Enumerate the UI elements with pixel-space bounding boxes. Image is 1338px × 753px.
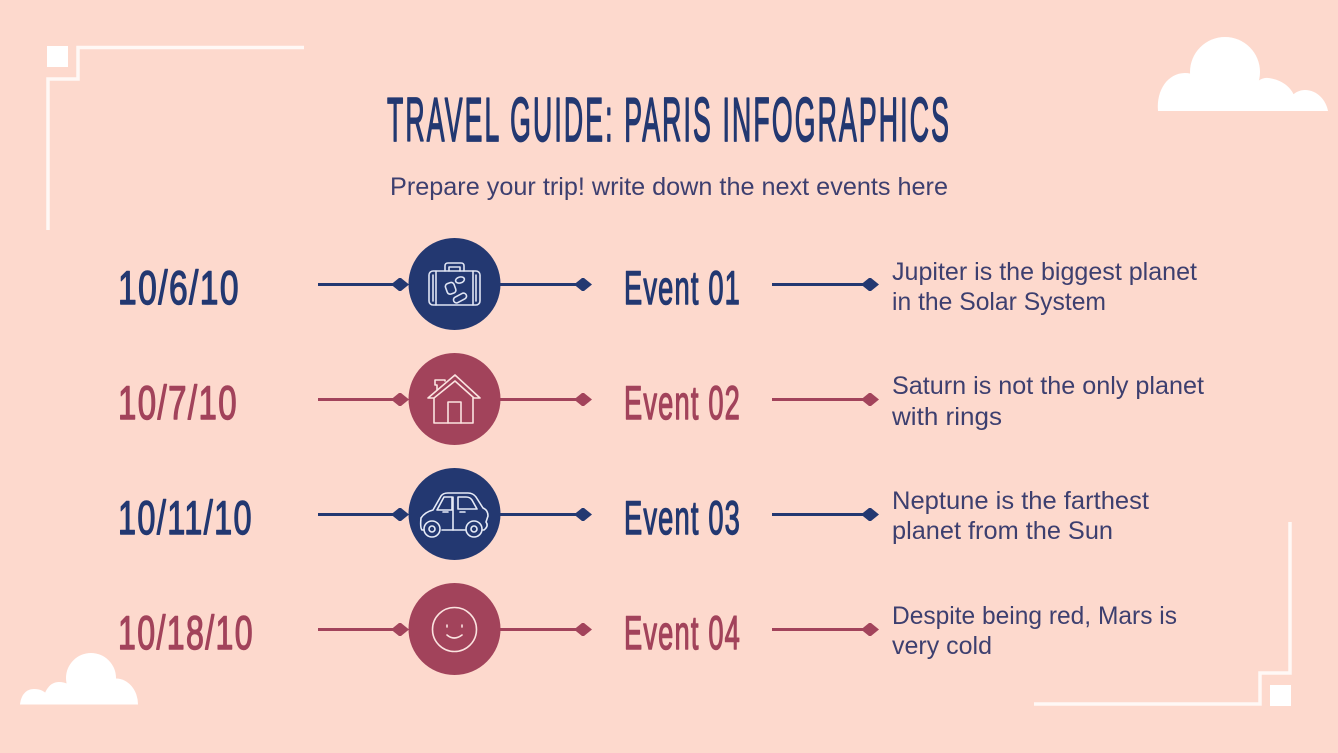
connector: icon to event	[498, 508, 592, 521]
connector: date to icon	[318, 623, 409, 636]
connector: date to icon	[318, 508, 409, 521]
description 2: Saturn is not the only planet	[892, 372, 1204, 400]
decorative corner frame: bottom right	[1034, 522, 1291, 706]
icon circle	[408, 468, 500, 560]
icon circle	[408, 583, 500, 675]
icon circle	[408, 353, 500, 445]
date 3: 10/11/10	[118, 491, 253, 544]
row 1	[118, 238, 1197, 330]
description 3: Neptune is the farthest	[892, 487, 1149, 515]
connector: icon to event	[498, 393, 592, 406]
icon: cloud top right	[1158, 37, 1328, 111]
event 3: Event 03	[624, 491, 741, 544]
row 4	[118, 583, 1177, 675]
connector: event to description	[772, 393, 879, 406]
icon: house	[428, 375, 480, 423]
icon: cloud bottom left	[20, 653, 138, 704]
event 2: Event 02	[624, 376, 741, 429]
connector: event to description	[772, 278, 879, 291]
connector: icon to event	[498, 278, 592, 291]
row 3	[118, 468, 1149, 560]
event 4: Event 04	[624, 606, 741, 659]
icon: smiley face	[432, 608, 476, 652]
description 4: very cold	[892, 632, 992, 660]
description 1: in the Solar System	[892, 288, 1106, 316]
row 2	[118, 353, 1204, 445]
date 4: 10/18/10	[118, 606, 254, 659]
decorative corner frame: top left	[47, 46, 304, 230]
connector: date to icon	[318, 393, 409, 406]
event 1: Event 01	[624, 261, 741, 314]
icon: car	[421, 493, 488, 537]
date 2: 10/7/10	[118, 376, 238, 429]
description 1: Jupiter is the biggest planet	[892, 258, 1197, 286]
description 2: with rings	[891, 403, 1002, 431]
connector: icon to event	[498, 623, 592, 636]
icon: suitcase	[429, 263, 480, 305]
connector: event to description	[772, 508, 879, 521]
icon circle	[408, 238, 500, 330]
date 1: 10/6/10	[118, 261, 240, 314]
connector: event to description	[772, 623, 879, 636]
connector: date to icon	[318, 278, 409, 291]
description 4: Despite being red, Mars is	[892, 602, 1177, 630]
subtitle: Prepare your trip! write down the next events here	[390, 173, 948, 201]
description 3: planet from the Sun	[892, 517, 1113, 545]
